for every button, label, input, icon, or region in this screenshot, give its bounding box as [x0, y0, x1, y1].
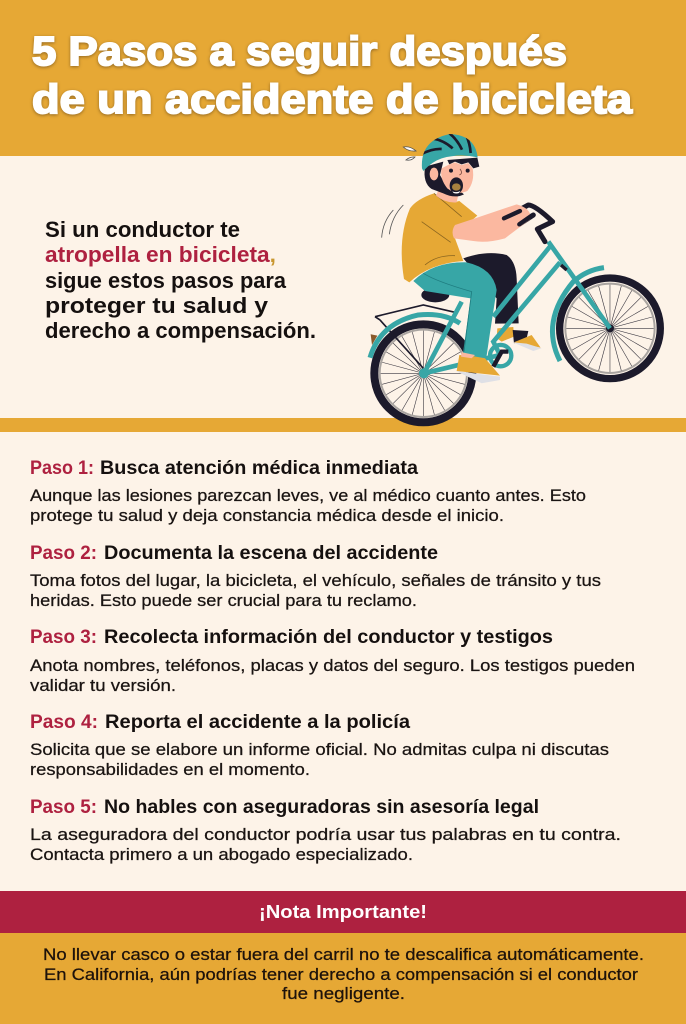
step 2: Documenta la escena del accidente: [104, 543, 438, 564]
icon: far leg: [463, 253, 519, 324]
step 1: Paso 1:: [30, 458, 94, 479]
icon: crank: [493, 352, 508, 367]
icon: ear: [430, 168, 438, 180]
note panel: fue negligente.: [282, 984, 405, 1003]
step 3: Anota nombres, teléfonos, placas y datos del seguro. Los testigos pueden: [30, 656, 635, 675]
icon: rear wheel: [374, 324, 472, 422]
intro text: derecho a compensación.: [45, 318, 316, 343]
icon: face: [441, 162, 473, 193]
step 1: Busca atención médica inmediata: [100, 458, 418, 479]
header band: [0, 0, 686, 156]
step 5: La aseguradora del conductor podría usar tus palabras en tu contra.: [30, 825, 621, 844]
icon: mouth: [450, 177, 463, 194]
icon: near shoe: [456, 352, 500, 383]
intro text: sigue estos pasos para: [45, 268, 287, 293]
step 4: Paso 4:: [30, 712, 98, 733]
step 4: Reporta el accidente a la policía: [105, 712, 410, 733]
step 5: No hables con aseguradoras sin asesoría legal: [104, 797, 539, 818]
icon: eyes: [449, 169, 470, 173]
note panel: No llevar casco o estar fuera del carril no te descalifica automáticamente.: [43, 945, 644, 964]
icon: nose: [459, 169, 462, 175]
icon: front fender: [552, 268, 604, 361]
icon: near leg: [413, 262, 497, 360]
icon: grip: [504, 211, 532, 224]
title: [32, 28, 633, 122]
step 3: Recolecta información del conductor y testigos: [104, 627, 553, 648]
intro text: proteger tu salud y: [45, 293, 269, 318]
icon: saddle: [421, 288, 449, 302]
step 1: Aunque las lesiones parezcan leves, ve al médico cuanto antes. Esto: [30, 486, 586, 505]
note heading band: [0, 891, 686, 933]
step 2: Toma fotos del lugar, la bicicleta, el vehículo, señales de tránsito y tus: [30, 571, 601, 590]
step 4: responsabilidades en el momento.: [30, 760, 310, 779]
step 2: [30, 543, 601, 610]
title: 5 Pasos a seguir después: [32, 28, 567, 74]
icon: front wheel: [560, 278, 660, 379]
icon: sweat drops: [403, 147, 416, 160]
panel: steps: [30, 458, 635, 864]
icon: bicycle frame: [424, 242, 610, 373]
intro text: atropella en bicicleta ,: [45, 242, 276, 267]
icon: motion lines: [382, 205, 403, 238]
step 1: [30, 458, 586, 525]
icon: head tube band: [561, 265, 567, 270]
icon: rear fender: [370, 314, 460, 358]
icon: neck: [436, 187, 459, 202]
icon: handlebar: [504, 205, 553, 242]
step 1: protege tu salud y deja constancia médica desde el inicio.: [30, 506, 504, 525]
icon: hair and beard strap: [425, 158, 479, 196]
step 4: [30, 712, 609, 779]
step 4: Solicita que se elabore un informe oficial. No admitas culpa ni discutas: [30, 740, 609, 759]
step 3: validar tu versión.: [30, 676, 176, 695]
step 2: Paso 2:: [30, 543, 97, 564]
icon: rear reflector: [371, 334, 377, 345]
intro text: [45, 217, 316, 343]
step 5: [30, 797, 621, 864]
icon: rear rack: [375, 305, 455, 368]
icon: leg seam lines: [423, 273, 472, 352]
note panel: [0, 933, 686, 1024]
step 3: Paso 3:: [30, 627, 97, 648]
note heading band: ¡Nota Importante!: [259, 902, 427, 922]
step 2: heridas. Esto puede ser crucial para tu reclamo.: [30, 591, 417, 610]
icon: helmet: [420, 132, 478, 171]
divider band: [0, 418, 686, 432]
step 3: [30, 627, 635, 695]
illustration: boy on bicycle: [370, 132, 660, 422]
icon: shirt: [402, 193, 477, 282]
step 5: Contacta primero a un abogado especializado.: [30, 845, 413, 864]
intro text: Si un conductor te: [45, 217, 240, 242]
icon: chainring: [490, 345, 511, 366]
step 5: Paso 5:: [30, 797, 97, 818]
icon: hub: [419, 368, 429, 378]
icon: shirt sleeve lines: [422, 193, 462, 265]
title: de un accidente de bicicleta: [32, 76, 633, 122]
icon: far shoe: [497, 327, 542, 351]
note panel: En California, aún podrías tener derecho a compensación si el conductor: [44, 965, 638, 984]
icon: arm: [453, 204, 531, 242]
